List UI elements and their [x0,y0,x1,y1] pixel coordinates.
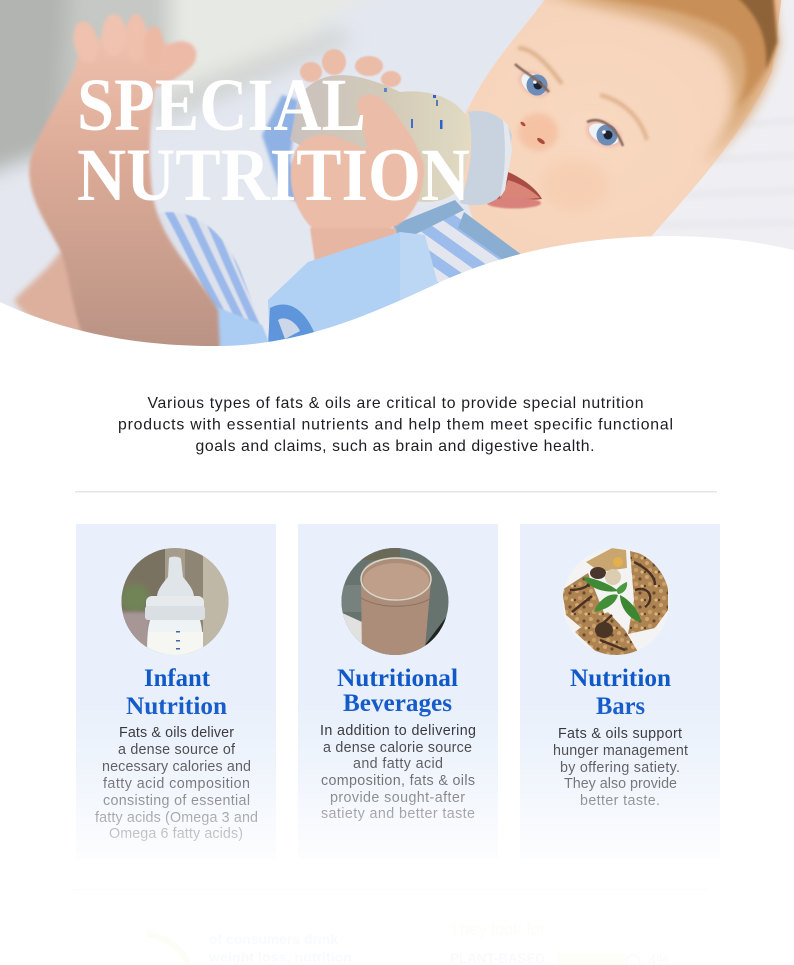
faded lower section: consumer statistic: of consumers drink [209,931,338,947]
bottle [290,75,512,205]
faded lower section: consumer statistic [147,931,352,965]
mouth [487,172,542,208]
body text: by offering satiety. [560,760,680,776]
heading [126,665,227,720]
body text: Fats & oils deliver [119,725,234,741]
body text: Omega 6 fatty acids) [109,826,243,842]
background: grey wall and bedding [0,0,352,180]
baby face [454,0,782,258]
body text: They also provide [564,776,677,792]
photo: baby bottle [120,546,230,658]
heading [337,665,458,717]
heading: Bars [596,693,645,720]
body text: and fatty acid [353,756,443,772]
intro text: Various types of fats & oils are critical to provide special nutrition [148,395,644,412]
intro text: products with essential nutrients and help them meet specific functional [118,416,673,434]
panel: nutritional beverages [298,524,498,821]
heading: Nutritional [337,665,458,692]
faded lower section: they look for: They look for: [450,920,550,939]
sleeve behind bottle [260,94,298,202]
body text: Fats & oils support [558,726,682,742]
body text [95,725,258,842]
striped trousers [164,211,270,346]
panel: nutrition bars [520,524,720,818]
intro text: goals and claims, such as brain and digestive health. [196,438,594,455]
heading: Infant [144,665,211,692]
body text [320,723,476,822]
body text: hunger management [553,743,688,759]
raised leg and foot [29,14,220,352]
body text: better taste. [580,793,660,809]
body text: a dense calorie source [323,740,472,756]
body text: a dense source of [118,742,235,758]
eye: left [514,48,562,103]
second small foot [12,250,84,332]
heading [570,665,671,720]
body text [553,726,688,809]
hair [540,0,778,165]
blue sleeve [268,232,430,348]
photo: granola bars with mint [562,548,670,655]
eye: right [582,95,647,153]
bodysuit stripes [394,198,520,288]
faded lower section: consumer statistic: weight loss, nutrition [208,949,352,965]
intro text [118,395,673,455]
title: SPECIAL [77,64,366,147]
heading: Nutrition [570,665,671,692]
faded lower section: they look for [450,920,670,965]
nose [518,113,558,151]
title [77,64,470,217]
heading: Beverages [343,690,452,717]
body text: necessary calories and [102,759,251,775]
body text: consisting of essential [103,793,250,809]
title: NUTRITION [77,134,470,217]
body text: fatty acids (Omega 3 and [95,810,258,826]
pillow [652,0,794,250]
baby hand on bottle [291,49,424,262]
body text: satiety and better taste [321,806,475,822]
body text: provide sought-after [330,790,465,806]
photo: shake in glass [340,546,450,660]
body text: fatty acid composition [103,776,250,792]
panel: infant nutrition [76,524,276,859]
body text: composition, fats & oils [321,773,475,789]
hero photo: baby drinking from bottle [0,0,794,352]
body text: In addition to delivering [320,723,476,739]
heading: Nutrition [126,693,227,720]
